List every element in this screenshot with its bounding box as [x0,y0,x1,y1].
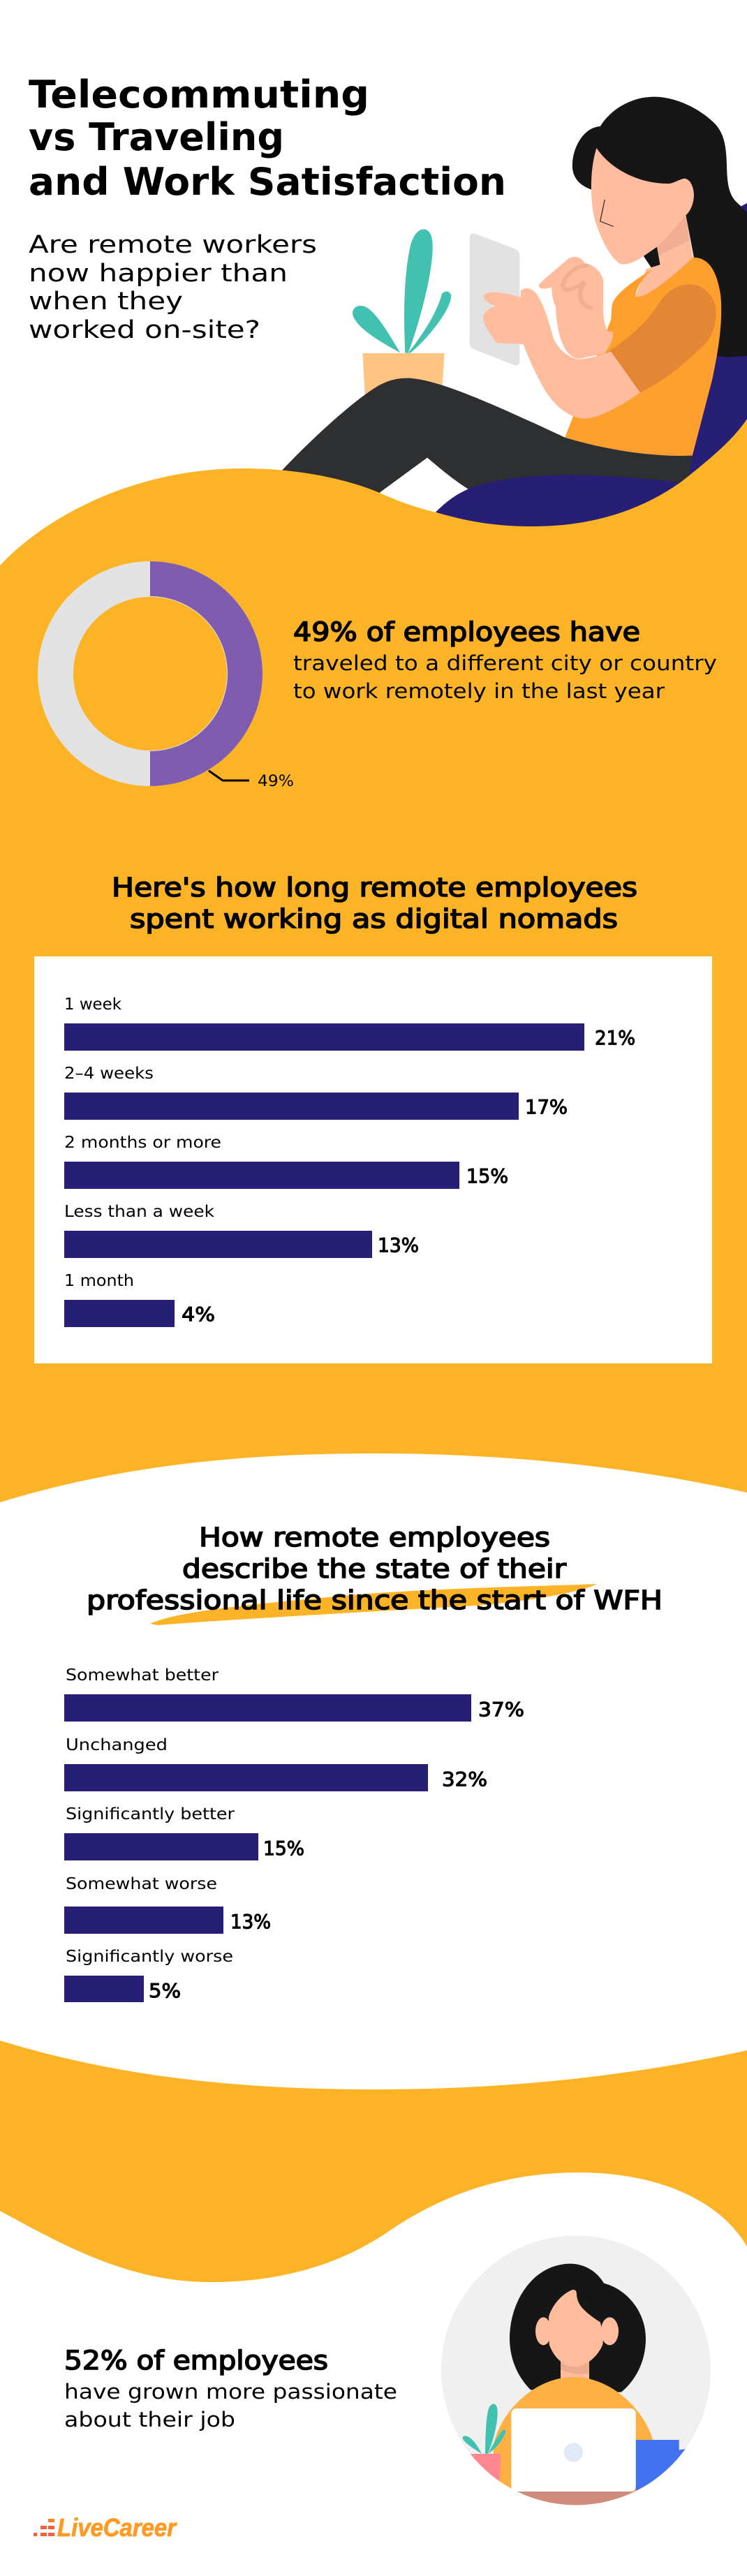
heading: digital nomads [112,873,637,934]
panel: digital nomad duration bar chart: 1 month [64,1272,134,1290]
donut chart: 49% [56,561,294,790]
panel: digital nomad duration bar chart: 21% [595,1026,635,1049]
subtitle: now happier than [29,260,288,288]
panel: digital nomad duration bar chart: 17% [525,1095,568,1118]
panel: digital nomad duration bar chart: 4% [182,1303,215,1326]
panel: digital nomad duration bar chart: Less than a week [64,1203,215,1221]
title: and Work Satisfaction [29,160,506,204]
panel: digital nomad duration bar chart: 13% [378,1234,419,1257]
bar chart: state of professional life: 32% [442,1768,487,1791]
bar chart: state of professional life: 13% [230,1910,271,1933]
panel: digital nomad duration bar chart: 1 week [64,995,122,1014]
bar chart: state of professional life: Significantly better [66,1805,235,1823]
heading: professional life: professional life since the start of WFH [87,1585,663,1615]
text block: 52% of employees: have grown more passionate [64,2380,397,2404]
text block: 49% of employees: traveled to a different city or country [293,651,717,675]
donut chart: 49%: 49% [258,773,294,790]
text block: 49% of employees: to work remotely in the last year [293,679,665,703]
panel: digital nomad duration bar chart: 2 months or more [64,1134,221,1152]
yellow background band: lower [0,2041,747,2282]
text block: 49% of employees: 49% of employees have [293,617,640,647]
bar chart: state of professional life: Significantly worse [66,1948,233,1966]
panel: digital nomad duration bar chart [34,956,712,1363]
bar chart: state of professional life: Somewhat better [66,1666,219,1685]
yellow background band: middle [0,419,747,1502]
bar chart: state of professional life: 5% [149,1979,181,2002]
heading: professional life [87,1523,663,1615]
subtitle: Are remote workers [29,231,317,259]
title [29,73,506,204]
heading: digital nomads: spent working as digital nomads [130,904,618,934]
logo: LiveCareer: LiveCareer [57,2513,177,2542]
text block: 52% of employees: 52% of employees [64,2346,328,2376]
text block: 52% of employees: about their job [64,2408,235,2431]
bar chart: state of professional life: 37% [478,1698,524,1721]
subtitle: worked on-site? [29,316,260,344]
heading: digital nomads: Here's how long remote employees [112,873,637,903]
text block: 49% of employees [293,617,717,703]
bar chart: state of professional life: Somewhat worse [66,1875,217,1893]
panel: digital nomad duration bar chart: 15% [466,1164,508,1187]
illustration: woman with tablet on beanbag [265,97,747,538]
subtitle: when they [29,288,183,316]
title: Telecommuting [29,73,369,117]
text block: 52% of employees [64,2346,397,2431]
bar chart: state of professional life: 15% [263,1837,304,1860]
subtitle [29,231,317,344]
panel: digital nomad duration bar chart: 2–4 weeks [64,1065,154,1083]
bar chart: state of professional life: Unchanged [66,1736,168,1754]
heading: professional life: describe the state of their [182,1554,567,1584]
illustration: woman with laptop in circle [441,2235,711,2508]
bar chart: state of professional life [64,1666,524,2002]
title: vs Traveling [29,115,284,159]
brush stroke highlight [150,1584,597,1625]
heading: professional life: How remote employees [199,1523,550,1553]
